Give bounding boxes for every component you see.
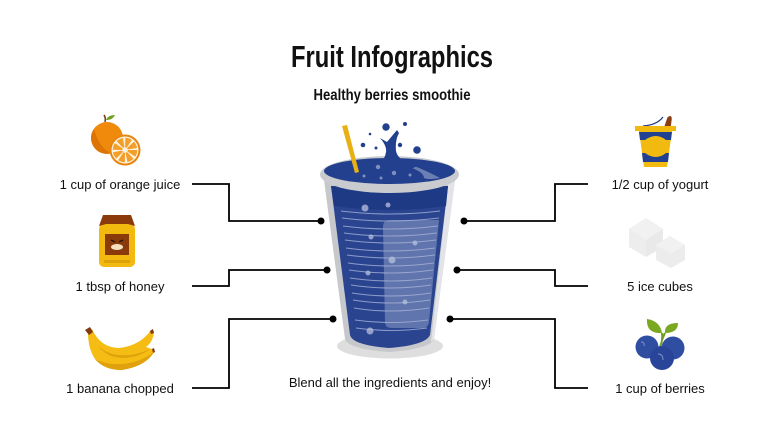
title: Fruit Infographics	[291, 39, 493, 74]
caption: Blend all the ingredients and enjoy!	[289, 375, 491, 390]
label: orange juice: 1 cup of orange juice	[60, 177, 180, 192]
bubbles	[362, 202, 418, 334]
smoothie surface	[324, 158, 455, 184]
icon: banana	[85, 327, 155, 370]
straw	[342, 125, 359, 173]
cup shadow	[337, 334, 443, 358]
splash droplets	[361, 122, 421, 154]
label: berries: 1 cup of berries	[615, 381, 705, 396]
icon: berries	[636, 319, 684, 370]
cup rim	[320, 156, 459, 193]
label: ice cubes: 5 ice cubes	[627, 279, 693, 294]
smoothie cup	[320, 122, 459, 358]
label: honey: 1 tbsp of honey	[76, 279, 165, 294]
subtitle: Healthy berries smoothie	[314, 87, 471, 104]
smoothie liquid	[331, 186, 448, 348]
icon: yogurt	[635, 117, 676, 167]
label: yogurt: 1/2 cup of yogurt	[612, 177, 709, 192]
icon: ice cubes	[629, 218, 685, 268]
icon: honey jar	[99, 215, 135, 267]
banana bunch	[88, 329, 154, 370]
cup body	[324, 180, 455, 352]
highlight panel	[383, 220, 439, 328]
label: banana: 1 banana chopped	[66, 381, 174, 396]
icon: orange	[91, 115, 140, 166]
connector lines left	[192, 184, 336, 388]
surface bubbles	[362, 165, 412, 180]
surface wave highlight	[398, 161, 440, 179]
connector lines right	[446, 184, 588, 388]
liquid ripples	[341, 211, 440, 330]
splash	[364, 130, 418, 172]
